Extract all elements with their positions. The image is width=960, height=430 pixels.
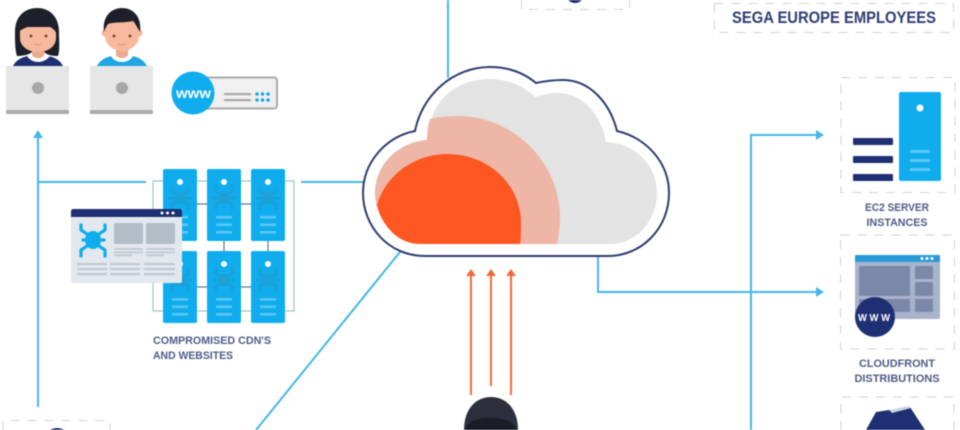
label: cloudfront distributions: DISTRIBUTIONS	[854, 373, 940, 385]
label: EC2 server instances: EC2 SERVER	[865, 202, 929, 214]
label: EC2 server instances: INSTANCES	[866, 217, 928, 229]
bottom-left dashed box with icon	[3, 420, 110, 430]
label: cloudfront distributions: CLOUDFRONT	[859, 358, 935, 370]
cloud	[363, 67, 669, 256]
sega europe employees box: SEGA EUROPE EMPLOYEES	[732, 9, 936, 27]
storage box with folder icon	[841, 397, 954, 430]
cloudfront box	[840, 235, 954, 349]
sega europe employees box	[714, 4, 954, 32]
arrowheads	[33, 130, 824, 297]
label: compromised CDNs and websites: COMPROMISED CDN'S	[153, 335, 271, 347]
infected website window	[71, 209, 182, 283]
label: cloudfront distributions	[854, 358, 940, 385]
label: EC2 server instances	[865, 202, 929, 229]
woman at laptop	[6, 8, 69, 114]
label: compromised CDNs and websites: AND WEBSITES	[153, 350, 233, 362]
icon: www server: www	[175, 85, 211, 101]
compromised CDN network	[153, 169, 294, 323]
icon: www server	[172, 72, 277, 114]
label: compromised CDNs and websites	[153, 335, 271, 362]
cloudfront box: W W W	[858, 312, 890, 324]
man at laptop	[90, 8, 153, 114]
top dashed box with icon	[522, 0, 630, 10]
EC2 server box	[841, 78, 955, 192]
attack arrows	[466, 269, 516, 395]
hacker hood	[464, 397, 518, 430]
